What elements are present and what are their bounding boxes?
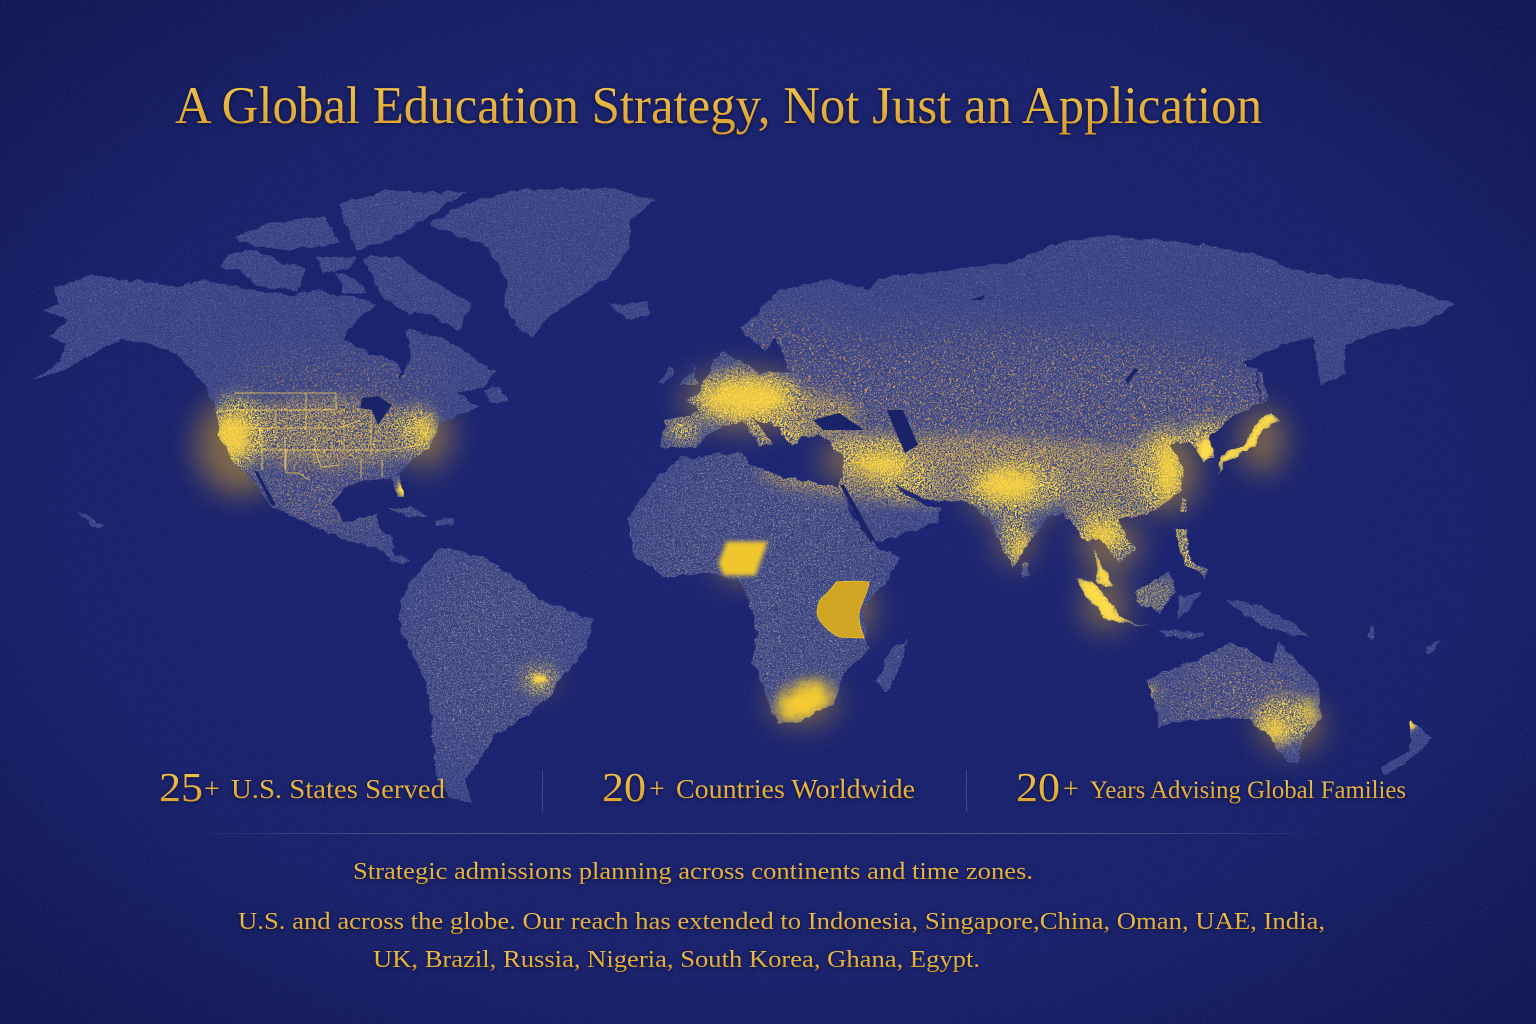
land mass xyxy=(33,188,1455,803)
city light specks xyxy=(208,315,1415,745)
description line 1: U.S. and across the globe. Our reach has extended to Indonesia, Singapore,China, Oman, UAE, India, xyxy=(238,909,1325,935)
outer light glow xyxy=(196,370,1322,751)
bright light cores xyxy=(212,380,1317,741)
scattered orange lights xyxy=(230,315,1310,745)
continents xyxy=(33,188,1455,803)
stat label: Countries Worldwide xyxy=(676,774,915,804)
moderate lights along the Eurasian belt xyxy=(230,391,1196,556)
highlighted region: Tanzania xyxy=(817,581,869,638)
stat plus: + xyxy=(1063,774,1079,805)
divider xyxy=(966,770,967,812)
coastal bright strips xyxy=(397,412,1415,731)
stat plus: + xyxy=(649,774,665,805)
horizontal rule xyxy=(180,833,1340,834)
description line 2: UK, Brazil, Russia, Nigeria, South Korea, Ghana, Egypt. xyxy=(373,947,980,973)
title: A Global Education Strategy, Not Just an Application xyxy=(175,77,1262,135)
land grain xyxy=(33,188,1455,803)
stat number: 20 xyxy=(602,764,646,810)
stat: U.S. states served xyxy=(159,764,446,810)
highlighted region: Nigeria xyxy=(719,542,767,575)
dense lights xyxy=(208,368,1317,744)
highlighted region: South Africa xyxy=(770,673,840,731)
inland seas xyxy=(254,295,1138,542)
U.S. state lines xyxy=(220,393,432,480)
stat label: U.S. States Served xyxy=(231,774,446,804)
stat label: Years Advising Global Families xyxy=(1090,777,1406,804)
warm grain over populated land xyxy=(220,360,1320,770)
world map xyxy=(33,188,1455,803)
tagline: Strategic admissions planning across continents and time zones. xyxy=(353,859,1033,885)
stat number: 20 xyxy=(1016,764,1060,810)
stat: years advising xyxy=(1016,764,1406,810)
stat plus: + xyxy=(204,774,220,805)
stat number: 25 xyxy=(159,764,203,810)
description block xyxy=(238,909,1325,973)
stat: countries worldwide xyxy=(602,764,915,810)
divider xyxy=(542,770,543,812)
